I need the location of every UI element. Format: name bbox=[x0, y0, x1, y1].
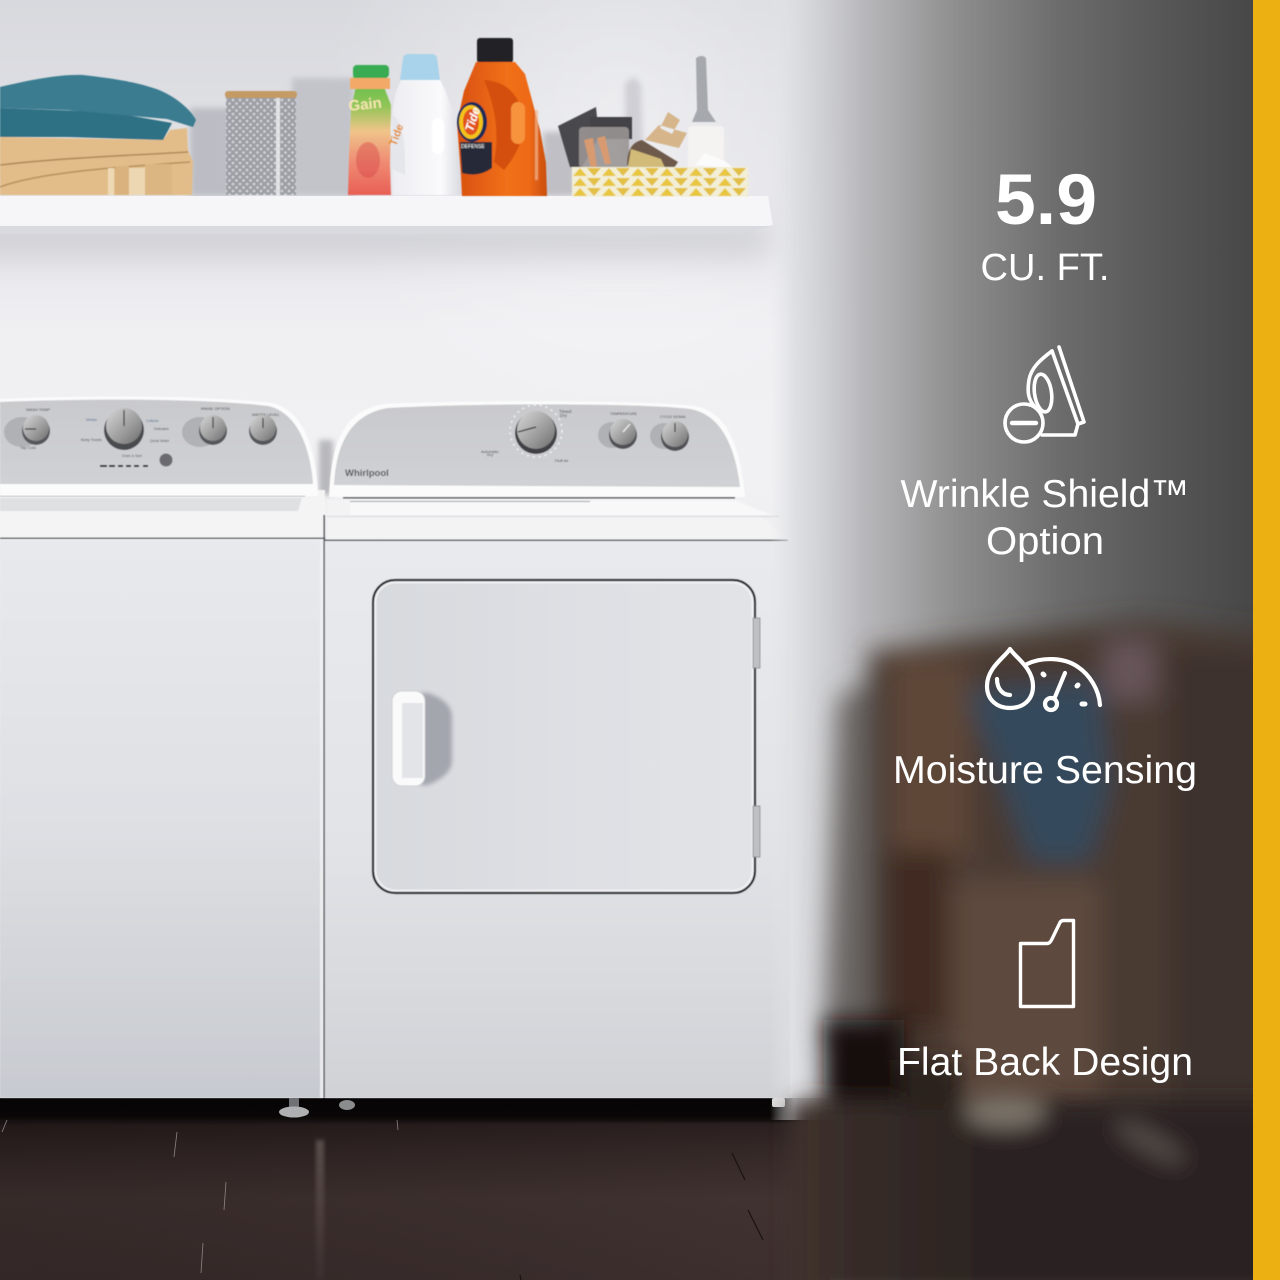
shelf bbox=[0, 196, 773, 256]
blurred laundry basket and shadows bbox=[826, 620, 1280, 1130]
appliance feet bbox=[279, 1098, 785, 1118]
washer console: Quick Wash bbox=[150, 439, 169, 443]
folded towels bbox=[0, 75, 196, 195]
washer console: WASH TEMP bbox=[26, 407, 50, 412]
caddy with brushes, jar and lint roller bbox=[558, 56, 748, 196]
washer lid bbox=[0, 490, 325, 540]
bottle: Gain: Gain bbox=[348, 95, 383, 115]
dryer console: Automatic bbox=[481, 449, 499, 454]
bottle: Tide orange: Tide bbox=[462, 105, 483, 133]
bottle: Tide orange bbox=[457, 38, 547, 196]
door hinges bbox=[753, 618, 760, 857]
blue towels bbox=[0, 108, 172, 140]
stat: 5.9 cu. ft.: 5.9 bbox=[995, 161, 1097, 240]
washer body bbox=[0, 540, 323, 1098]
label: Wrinkle Shield Option: Wrinkle Shield™ bbox=[900, 473, 1190, 516]
washer console: Bulky Towels bbox=[81, 438, 102, 442]
dotted canister bbox=[225, 91, 297, 195]
stat: 5.9 cu. ft. bbox=[980, 161, 1110, 289]
dryer (right appliance) bbox=[324, 401, 790, 1098]
dryer console: Dry bbox=[487, 452, 493, 457]
stat: 5.9 cu. ft.: CU. FT. bbox=[980, 247, 1110, 289]
dryer console: Whirlpool bbox=[345, 468, 389, 479]
yellow triangle box bbox=[572, 167, 748, 196]
yellow side bar bbox=[1253, 0, 1280, 1280]
dryer body bbox=[325, 540, 790, 1098]
icon: iron with minus bbox=[1005, 347, 1084, 442]
icon: moisture drop and gauge bbox=[987, 649, 1100, 710]
washer console: Drain & Spin bbox=[122, 454, 142, 458]
label: Wrinkle Shield Option bbox=[900, 473, 1190, 563]
dryer console: Timed bbox=[559, 409, 572, 414]
washer console: Cottons bbox=[146, 419, 159, 423]
blurred floor bbox=[790, 1020, 1280, 1280]
blurred background veil bbox=[770, 0, 1280, 1280]
floor bbox=[0, 1098, 830, 1280]
washer console: Whites bbox=[86, 418, 97, 422]
label: Moisture Sensing: Moisture Sensing bbox=[893, 749, 1197, 792]
shadows on wall bbox=[190, 78, 643, 495]
beige towels bbox=[0, 128, 193, 195]
door handle bbox=[392, 691, 452, 786]
dryer console bbox=[329, 401, 745, 497]
icon: flat back outline bbox=[1020, 920, 1074, 1006]
dryer lid bbox=[325, 497, 790, 541]
washer console: RINSE OPTION bbox=[201, 406, 230, 411]
bottle: white detergent: Tide bbox=[387, 122, 406, 148]
washer console: Delicates bbox=[154, 427, 169, 431]
dryer console: Fluff Air bbox=[555, 458, 569, 463]
washer console: Tap Cold bbox=[20, 445, 36, 450]
bottle: Tide orange: DEFENSE bbox=[461, 144, 485, 150]
bottle: white detergent bbox=[387, 54, 463, 195]
lint roller bbox=[688, 56, 733, 168]
bottle: Gain bbox=[348, 65, 391, 195]
washer console: WATER LEVEL bbox=[252, 412, 280, 417]
label: Flat Back Design: Flat Back Design bbox=[897, 1041, 1193, 1084]
dryer console: Dry bbox=[560, 413, 568, 418]
dryer door bbox=[373, 580, 755, 893]
washer console bbox=[0, 397, 318, 496]
label: Wrinkle Shield Option: Option bbox=[986, 520, 1104, 563]
dryer console: CYCLE SIGNAL bbox=[660, 415, 686, 419]
washer (left appliance) bbox=[0, 397, 325, 1098]
dryer console: TEMPERATURE bbox=[610, 412, 637, 416]
